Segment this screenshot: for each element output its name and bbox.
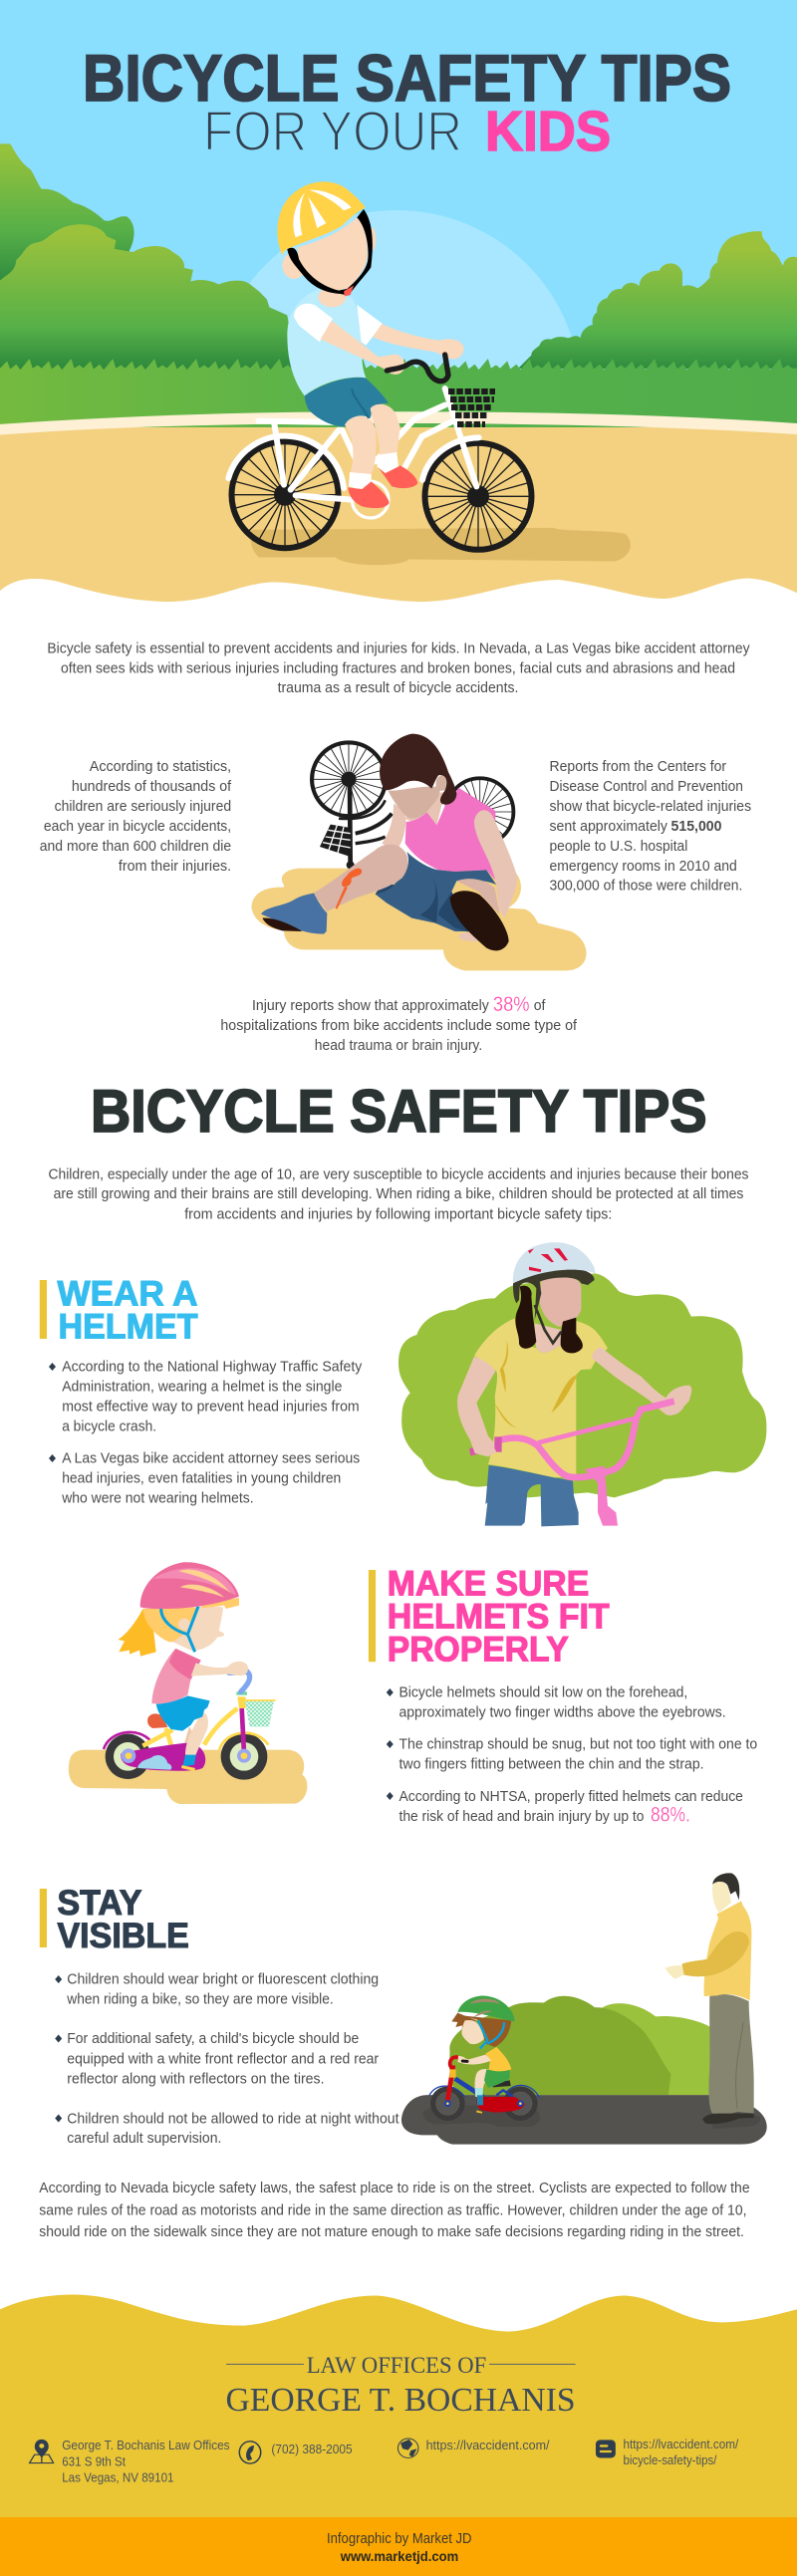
- title line 2: FOR YOUR: [203, 100, 462, 163]
- bullet list: helmet fit: According to NHTSA, properly fitted helmets can reduce: [398, 1789, 743, 1805]
- text block: statistics left: [40, 759, 232, 875]
- text block: tips introduction: [48, 1167, 749, 1222]
- text block: Nevada bicycle laws: same rules of the road as motorists and ride in the same direction as traffic. However, children under the age of 10,: [39, 2202, 747, 2218]
- law office logo: LAW OFFICES OF: [307, 2353, 486, 2378]
- text block: statistics left: and more than 600 children die: [40, 839, 231, 855]
- text block: introduction: trauma as a result of bicycle accidents.: [278, 680, 518, 696]
- child on red bicycle: [423, 1995, 540, 2127]
- icon: phone: [239, 2442, 261, 2463]
- landscape: bushes, grass and road: [0, 143, 797, 631]
- bicycle wheels: [231, 441, 532, 550]
- adult figure: [664, 1873, 760, 2129]
- contact: blog: [596, 2437, 739, 2467]
- text block: statistics right: Reports from the Centers for: [550, 759, 726, 775]
- contact: address: George T. Bochanis Law Offices: [62, 2438, 230, 2452]
- bullet list: stay visible: Children should wear bright or fluorescent clothing: [67, 1972, 379, 1988]
- heading: wear a helmet: WEAR A: [58, 1275, 197, 1314]
- text block: statistics right: emergency rooms in 2010 and: [550, 859, 737, 875]
- bullet list: wear a helmet: Administration, wearing a helmet is the single: [62, 1380, 342, 1396]
- bullet list: stay visible: For additional safety, a child's bicycle should be: [67, 2031, 359, 2047]
- illustration: adult watching child ride on path: [401, 1873, 767, 2145]
- text block: introduction: often sees kids with serious injuries including fractures and broken bones, facial cuts and abrasions and head: [61, 660, 735, 676]
- text block: statistics left: hundreds of thousands of: [72, 779, 232, 795]
- basket: [448, 391, 495, 424]
- bicycle frame, legs and shoes: [228, 378, 479, 518]
- callout: 38 percent statistic: head trauma or brain injury.: [315, 1038, 482, 1054]
- child upper body with yellow helmet: [277, 181, 464, 395]
- panel: stay visible: [40, 1873, 767, 2147]
- bullet list: wear a helmet: who were not wearing helmets.: [61, 1491, 254, 1507]
- text block: statistics right: 515,000: [671, 819, 721, 835]
- text block: Nevada bicycle laws: [39, 2181, 750, 2240]
- title line 1: BICYCLE SAFETY TIPS: [83, 41, 731, 115]
- bullet list: stay visible: Children should not be allowed to ride at night without: [67, 2111, 399, 2127]
- bullet list: wear a helmet: most effective way to prevent head injuries from: [62, 1400, 360, 1416]
- heading: bicycle safety tips: BICYCLE SAFETY TIPS: [91, 1078, 707, 1145]
- panel: footer: [0, 2295, 797, 2576]
- callout: 38 percent statistic: of: [534, 998, 546, 1014]
- text block: statistics right: people to U.S. hospital: [550, 839, 687, 855]
- footer credit: Infographic by Market JD: [327, 2530, 472, 2547]
- bullet list: stay visible: [55, 1972, 398, 2147]
- title: [83, 41, 731, 163]
- icon: globe: [398, 2439, 418, 2457]
- contact: phone: (702) 388-2005: [271, 2442, 353, 2456]
- bullet list: stay visible: reflector along with reflectors on the tires.: [67, 2072, 325, 2088]
- illustration: injured child with fallen bicycle: [251, 734, 587, 970]
- text block: Nevada bicycle laws: According to Nevada bicycle safety laws, the safest place to ride is on the street. Cyclists are expected to follow the: [39, 2181, 750, 2196]
- law office logo: GEORGE T. BOCHANIS: [225, 2382, 576, 2419]
- footer credit bar: [0, 2517, 797, 2576]
- contact: website: https://lvaccident.com/: [426, 2438, 550, 2452]
- text block: statistics left: children are seriously injured: [55, 799, 231, 815]
- text block: introduction: [47, 642, 750, 696]
- text block: statistics right: 300,000 of those were children.: [550, 879, 742, 895]
- text block: statistics left: from their injuries.: [119, 859, 231, 875]
- callout: 38 percent statistic: 38%: [493, 993, 530, 1016]
- icon: blogger: [596, 2440, 616, 2457]
- bullet list: helmet fit: [387, 1684, 757, 1827]
- heading: stay visible: [40, 1884, 189, 1955]
- panel: wear a helmet: [40, 1242, 766, 1526]
- panel: make sure helmets fit properly: [69, 1562, 757, 1827]
- bushes and path: [401, 1996, 767, 2145]
- law office logo: [225, 2353, 576, 2419]
- footer credit: [327, 2530, 472, 2564]
- bullet list: wear a helmet: [49, 1360, 363, 1507]
- text block: statistics right: show that bicycle-related injuries: [550, 799, 751, 815]
- injured child: [261, 734, 517, 950]
- text block: statistics right: Disease Control and Prevention: [550, 779, 743, 795]
- heading: wear a helmet: HELMET: [58, 1308, 197, 1347]
- bullet list: helmet fit: two fingers fitting between the chin and the strap.: [398, 1757, 704, 1773]
- contact: blog: https://lvaccident.com/: [624, 2437, 739, 2451]
- callout: 38 percent statistic: [220, 993, 578, 1054]
- bullet list: stay visible: when riding a bike, so they are more visible.: [66, 1991, 334, 2007]
- footer background wave: [0, 2295, 797, 2519]
- text block: Nevada bicycle laws: should ride on the sidewalk since they are not mature enough to make safe decisions regarding riding in the street.: [39, 2224, 744, 2240]
- bullet list: helmet fit: the risk of head and brain injury by up to: [398, 1809, 644, 1825]
- sand patch: [251, 869, 587, 970]
- heading: make sure helmets fit properly: MAKE SURE: [388, 1565, 589, 1604]
- text block: tips introduction: Children, especially under the age of 10, are very susceptible to bicycle accidents and injuries because their bones: [48, 1167, 749, 1183]
- heading: wear a helmet: [40, 1275, 197, 1347]
- footer credit: www.marketjd.com: [340, 2548, 458, 2564]
- text block: tips introduction: are still growing and their brains are still developing. When riding a bike, children should be protected at all times: [54, 1186, 743, 1202]
- bullet list: helmet fit: approximately two finger widths above the eyebrows.: [398, 1705, 726, 1721]
- text block: statistics right: [550, 759, 751, 895]
- contact: address: [30, 2438, 230, 2484]
- contact: blog: bicycle-safety-tips/: [624, 2452, 717, 2467]
- text block: statistics left: According to statistics,: [90, 759, 231, 775]
- contact: address: 631 S 9th St: [62, 2453, 126, 2468]
- bullet list: helmet fit: 88%.: [651, 1803, 690, 1827]
- bullet list: helmet fit: Bicycle helmets should sit low on the forehead,: [398, 1684, 687, 1700]
- icon: map pin: [30, 2440, 54, 2463]
- bullet list: wear a helmet: head injuries, even fatalities in young children: [62, 1471, 341, 1487]
- sky: [0, 0, 797, 598]
- title accent: KIDS: [485, 100, 611, 163]
- callout: 38 percent statistic: Injury reports show that approximately: [252, 998, 490, 1014]
- heading: stay visible: STAY: [58, 1884, 141, 1923]
- text block: tips introduction: from accidents and injuries by following important bicycle safety tips:: [184, 1206, 612, 1222]
- bullet list: stay visible: equipped with a white front reflector and a red rear: [67, 2052, 379, 2068]
- bullet list: stay visible: careful adult supervision.: [67, 2131, 221, 2147]
- bullet list: helmet fit: The chinstrap should be snug, but not too tight with one to: [398, 1737, 757, 1753]
- bullet list: wear a helmet: a bicycle crash.: [62, 1419, 156, 1435]
- text block: introduction: Bicycle safety is essential to prevent accidents and injuries for kids. In Nevada, a Las Vegas bike accident attorney: [47, 642, 750, 657]
- bullet list: wear a helmet: According to the National Highway Traffic Safety: [62, 1360, 363, 1376]
- fallen bicycle wheels: [312, 742, 513, 846]
- heading: stay visible: VISIBLE: [58, 1917, 189, 1955]
- illustration: girl in white helmet with pink bicycle: [398, 1242, 766, 1526]
- heading: make sure helmets fit properly: PROPERLY: [388, 1630, 569, 1669]
- bullet list: wear a helmet: A Las Vegas bike accident attorney sees serious: [62, 1451, 360, 1467]
- sun: [212, 210, 581, 579]
- callout: 38 percent statistic: hospitalizations from bike accidents include some type of: [220, 1018, 578, 1034]
- text block: statistics right: sent approximately: [550, 819, 668, 835]
- contact: phone: [239, 2442, 353, 2463]
- contact: address: Las Vegas, NV 89101: [62, 2470, 174, 2484]
- heading: make sure helmets fit properly: HELMETS FIT: [388, 1597, 610, 1636]
- illustration: child riding white bicycle: [228, 181, 531, 550]
- illustration: girl with pink helmet on small bicycle: [69, 1562, 307, 1804]
- heading: make sure helmets fit properly: [369, 1565, 610, 1669]
- contact: website: [398, 2438, 550, 2457]
- text block: statistics left: each year in bicycle accidents,: [44, 819, 231, 835]
- panel: hero scene: [0, 0, 797, 631]
